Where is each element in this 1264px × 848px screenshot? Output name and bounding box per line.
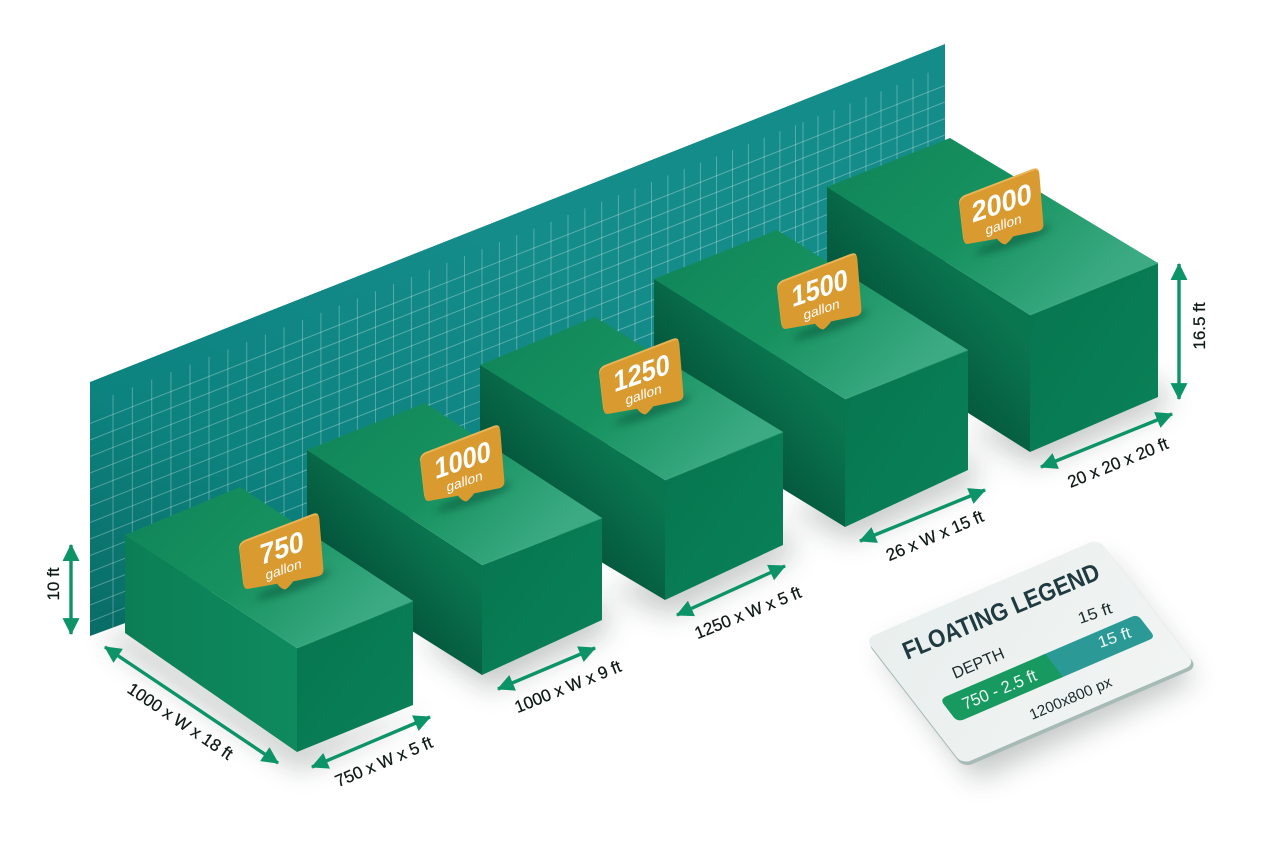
- dimension: 10 ft height: 10 ft: [44, 567, 63, 601]
- ground shadows: [105, 380, 1170, 770]
- legend bar left value: 750 - 2.5 ft: [959, 666, 1040, 714]
- badge: 1250 gallon: [599, 333, 692, 434]
- badge: 1250 gallon: 1250: [613, 348, 670, 399]
- block: 1000 gallon: [307, 403, 602, 675]
- dimension: 26 x W x 15 ft: 26 x W x 15 ft: [883, 507, 987, 565]
- badge: 1500 gallon: [777, 248, 870, 349]
- block: 1250 gallon: [480, 317, 783, 600]
- backdrop wall with grid: [90, 40, 945, 640]
- badge: 2000 gallon: 2000: [971, 177, 1032, 230]
- block: 2000 gallon: [827, 138, 1158, 452]
- dimension: 1000 x W x 9 ft: 1000 x W x 9 ft: [512, 657, 624, 717]
- dimension: 10 ft height: [44, 545, 71, 634]
- dimension: 750 x W x 5 ft: 750 x W x 5 ft: [332, 733, 436, 791]
- badge: 2000 gallon: gallon: [985, 210, 1022, 238]
- dimension: 16.5 ft height: [1179, 264, 1209, 399]
- dimension: 1250 x W x 5 ft: [677, 566, 804, 643]
- badge: 750 gallon: gallon: [265, 555, 302, 583]
- dimension: 20 x 20 x 20 ft: 20 x 20 x 20 ft: [1065, 434, 1171, 492]
- badge: 1500 gallon: 1500: [791, 263, 848, 314]
- badge: 750 gallon: [239, 508, 332, 609]
- dimension: 16.5 ft height: 16.5 ft: [1190, 302, 1209, 350]
- dimension: 1000 x W x 18 ft: 1000 x W x 18 ft: [124, 679, 237, 764]
- dimension: 1000 x W x 18 ft: [105, 647, 278, 764]
- badge: 1500 gallon: gallon: [803, 295, 840, 323]
- legend size note: 1200x800 px: [1027, 673, 1115, 724]
- legend depth label: DEPTH: [950, 645, 1007, 683]
- badge: 1250 gallon: gallon: [625, 380, 662, 408]
- legend title: FLOATING LEGEND: [898, 558, 1104, 666]
- badge: 1000 gallon: [420, 420, 513, 521]
- dimension: 750 x W x 5 ft: [312, 717, 436, 791]
- legend bar right value: 15 ft: [1096, 624, 1134, 652]
- badge: 1000 gallon: 1000: [434, 435, 491, 486]
- dimension: 26 x W x 15 ft: [860, 490, 987, 565]
- badge: 750 gallon: 750: [259, 525, 304, 572]
- badge: 2000 gallon: [959, 163, 1052, 264]
- dimension: 20 x 20 x 20 ft: [1041, 414, 1172, 492]
- block: 1500 gallon: [654, 230, 968, 527]
- block: 750 gallon: [125, 487, 413, 752]
- floating legend card: [864, 539, 1197, 780]
- legend top value: 15 ft: [1076, 600, 1115, 628]
- dimension: 1250 x W x 5 ft: 1250 x W x 5 ft: [692, 583, 804, 643]
- badge: 1000 gallon: gallon: [446, 467, 483, 495]
